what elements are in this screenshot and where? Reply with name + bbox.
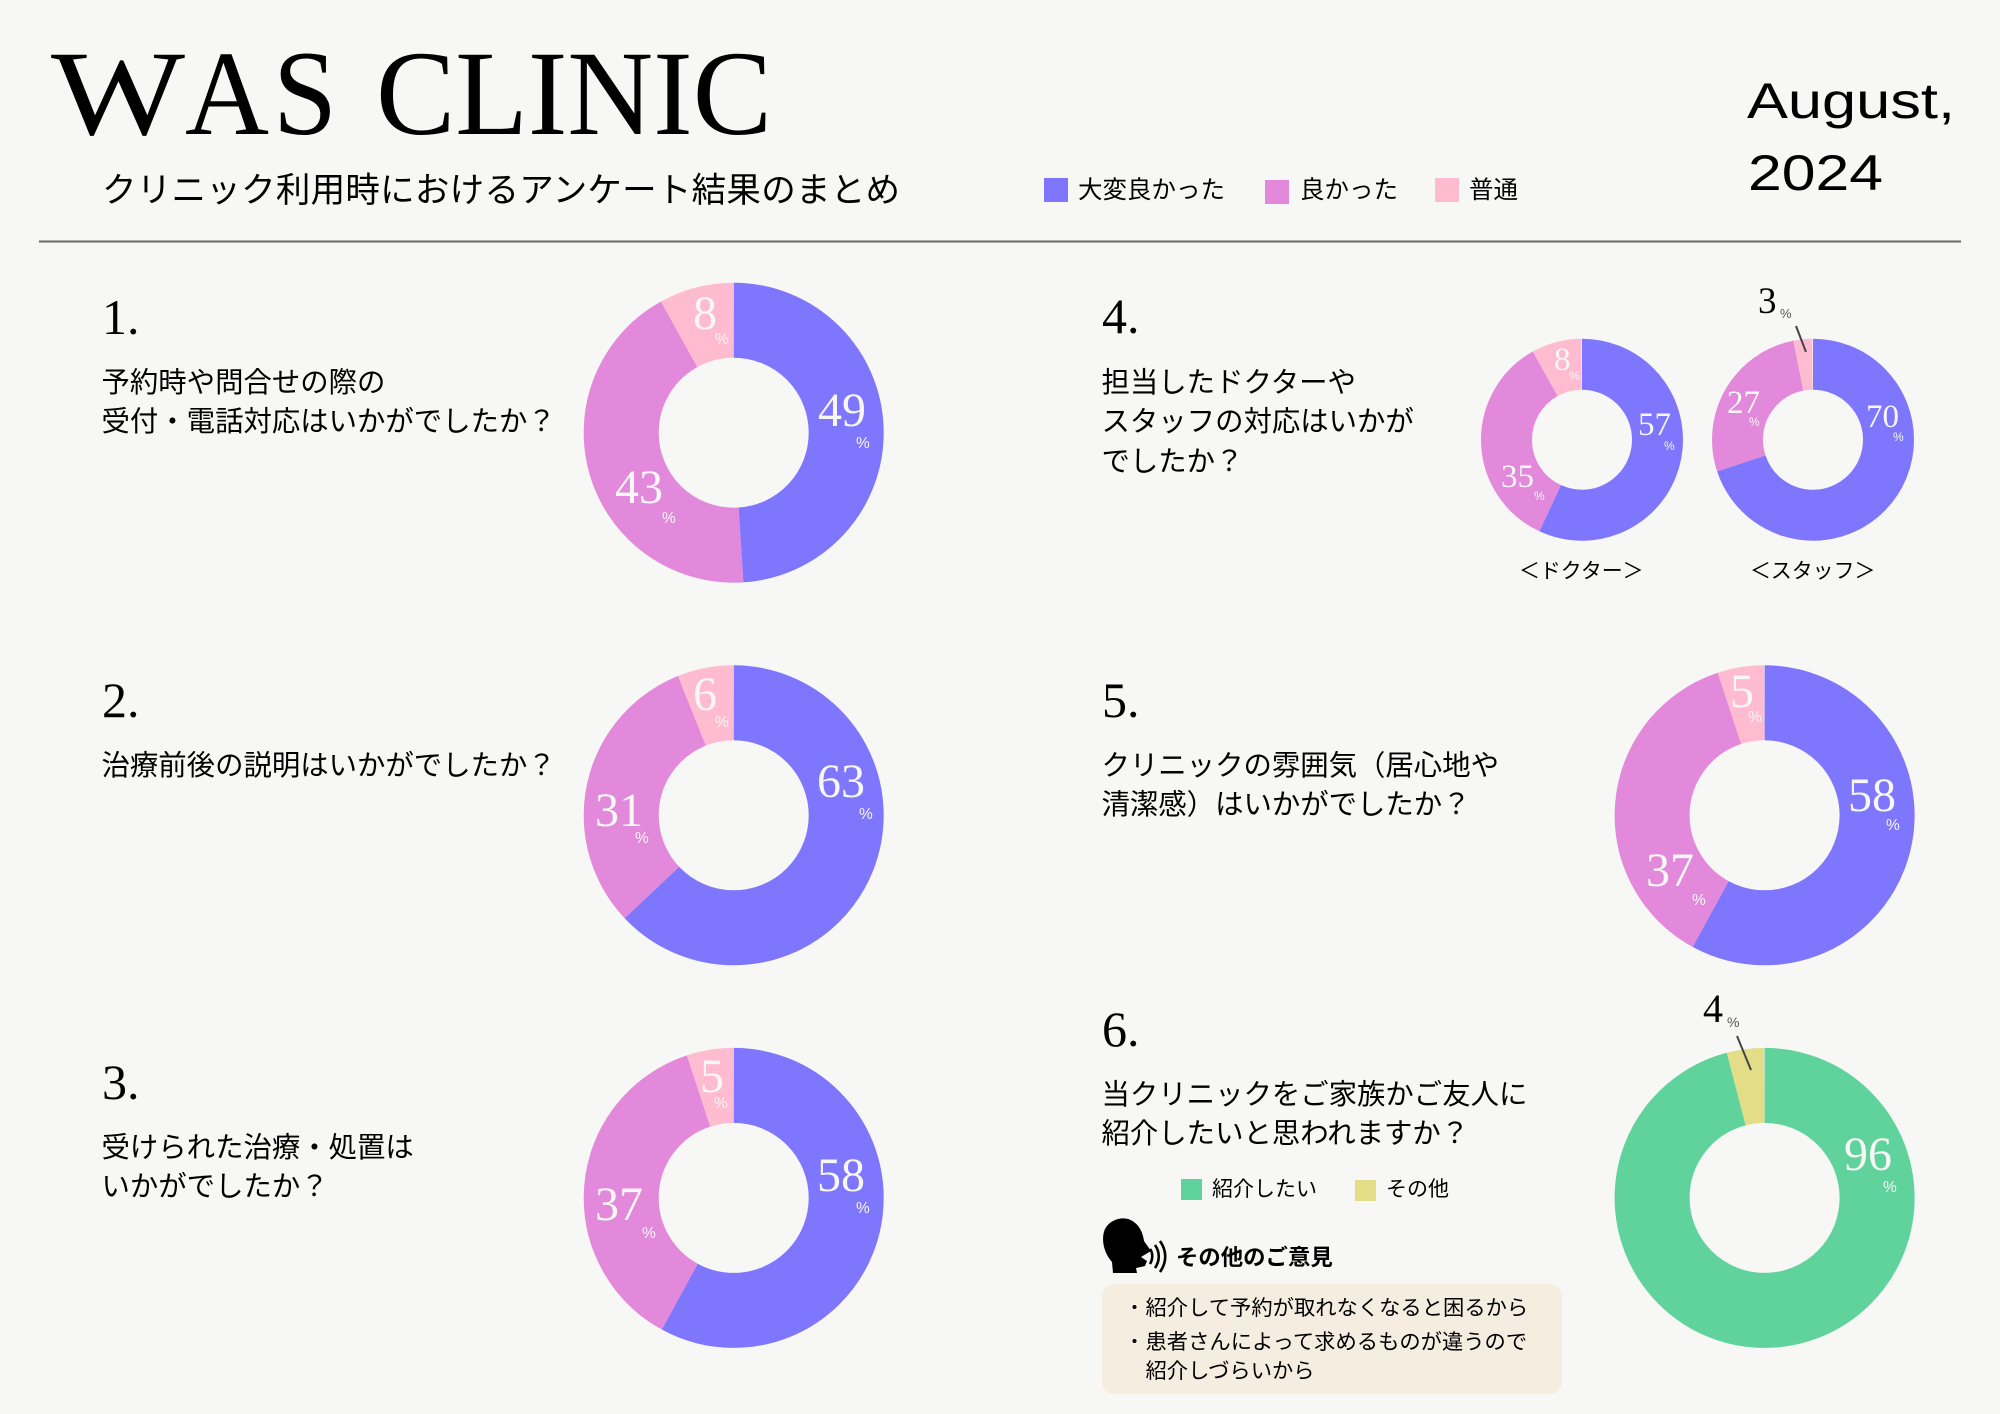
heading: other opinions: その他のご意見 (1176, 1244, 1333, 1270)
donut chart 1 (615, 287, 870, 545)
donut chart 5: % (1692, 892, 1706, 909)
panel: question 2: 治療前後の説明はいかがでしたか？ (102, 750, 556, 782)
donut chart 2: 63 (817, 755, 865, 808)
title: CLINIC (376, 27, 772, 161)
donut chart 5: 37 (1646, 844, 1694, 897)
legend: recommend: 紹介したい (1212, 1178, 1317, 1201)
date: August, (1747, 73, 1955, 129)
donut chart 4: staff: % (1749, 415, 1760, 429)
donut chart 4: doctor: 8 (1554, 342, 1570, 378)
callout: other opinions: 患者さんによって求めるものが違うので (1146, 1330, 1527, 1354)
donut chart 2: 6 (693, 668, 717, 721)
caption: doctor: ＜ドクター＞ (1519, 560, 1644, 583)
donut chart 3: % (714, 1095, 728, 1112)
donut chart 4: staff (1727, 364, 1904, 515)
donut chart 5: % (1748, 709, 1762, 726)
donut chart 1: 43 (615, 461, 663, 514)
donut chart 3: 37 (595, 1178, 643, 1231)
callout: other opinions: 紹介して予約が取れなくなると困るから (1146, 1296, 1528, 1320)
donut chart 2 (595, 668, 873, 928)
donut chart 4: doctor: % (1664, 439, 1675, 453)
legend: ratings: 大変良かった (1078, 176, 1225, 204)
panel: question 2 (102, 668, 873, 928)
donut chart 4: doctor: % (1569, 369, 1580, 383)
legend: recommend: その他 (1386, 1178, 1449, 1201)
panel: question 4: 4. (1102, 288, 1140, 344)
donut chart 6: 96 (1844, 1128, 1892, 1181)
callout: other 4%: 4 (1703, 986, 1723, 1031)
panel: question 3 (102, 1050, 870, 1310)
panel: question 3: いかがでしたか？ (102, 1171, 329, 1203)
panel: question 3: 受けられた治療・処置は (102, 1132, 414, 1164)
panel: question 6: 6. (1102, 1001, 1140, 1057)
callout: other opinions: 紹介しづらいから (1146, 1359, 1315, 1383)
donut chart 4: doctor: 57 (1638, 407, 1671, 443)
donut chart 6 (1652, 1085, 1897, 1310)
panel: question 4 (1102, 281, 1904, 583)
donut chart 5 (1646, 665, 1900, 928)
donut chart 5: % (1886, 817, 1900, 834)
panel: question 1 (102, 287, 870, 545)
donut chart 1: 8 (693, 287, 717, 340)
title: W (51, 27, 185, 161)
panel: question 4: 担当したドクターや (1102, 367, 1356, 399)
panel: question 6 (1102, 986, 1897, 1394)
donut chart 3: 58 (817, 1149, 865, 1202)
donut chart 1: % (715, 331, 729, 348)
callout: other opinions (1102, 1284, 1562, 1394)
donut chart 3 (595, 1050, 870, 1310)
callout: other 4%: % (1727, 1014, 1739, 1030)
icon: speaking head (1103, 1218, 1165, 1273)
callout: staff 3%: 3 (1758, 281, 1776, 322)
legend: recommend (1181, 1178, 1449, 1201)
callout: other 4% (1703, 986, 1751, 1070)
panel: question 5: 清潔感）はいかがでしたか？ (1102, 789, 1471, 821)
legend: ratings (1044, 176, 1518, 204)
donut chart 4: staff: 27 (1727, 385, 1760, 421)
donut chart 3: 5 (700, 1050, 724, 1103)
callout: staff 3%: % (1780, 306, 1792, 321)
donut chart 2: % (635, 830, 649, 847)
donut chart 3: % (642, 1225, 656, 1242)
panel: question 6: 紹介したいと思われますか？ (1102, 1118, 1469, 1150)
panel: question 1: 受付・電話対応はいかがでしたか？ (102, 406, 556, 438)
donut chart 3: % (856, 1200, 870, 1217)
panel: question 2: 2. (102, 672, 140, 728)
donut chart 2: 31 (595, 784, 643, 837)
caption: staff: ＜スタッフ＞ (1750, 560, 1875, 583)
panel: question 5: 5. (1102, 672, 1140, 728)
donut chart 4: staff: % (1893, 430, 1904, 444)
panel: question 4: スタッフの対応はいかが (1102, 406, 1414, 438)
subtitle: クリニック利用時におけるアンケート結果のまとめ (102, 172, 900, 210)
title: A (185, 27, 269, 161)
panel: question 4: でしたか？ (1102, 446, 1243, 478)
legend: ratings: 普通 (1469, 176, 1518, 204)
donut chart 2: % (859, 806, 873, 823)
panel: question 5 (1102, 665, 1900, 928)
donut chart 4: doctor (1501, 342, 1675, 515)
panel: question 6: 当クリニックをご家族かご友人に (1102, 1079, 1527, 1111)
donut chart 4: doctor: 35 (1501, 459, 1534, 495)
donut chart 4: staff: 70 (1866, 399, 1899, 435)
donut chart 2: % (715, 714, 729, 731)
donut chart 1: 49 (818, 384, 866, 437)
donut chart 4: doctor: % (1534, 489, 1545, 503)
date (1747, 73, 1955, 201)
donut chart 1: % (662, 510, 676, 527)
date: 2024 (1748, 145, 1883, 201)
panel: question 3: 3. (102, 1054, 140, 1110)
donut chart 6: % (1883, 1179, 1897, 1196)
panel: question 5: クリニックの雰囲気（居心地や (1102, 750, 1499, 782)
donut chart 1: % (856, 435, 870, 452)
donut chart 5: 5 (1730, 665, 1754, 718)
panel: question 1: 1. (102, 289, 140, 345)
title: S (273, 27, 337, 161)
donut chart 5: 58 (1848, 769, 1896, 822)
legend: ratings: 良かった (1300, 176, 1398, 204)
panel: question 1: 予約時や問合せの際の (102, 367, 385, 399)
title (51, 27, 772, 161)
callout: staff 3% (1758, 281, 1806, 352)
